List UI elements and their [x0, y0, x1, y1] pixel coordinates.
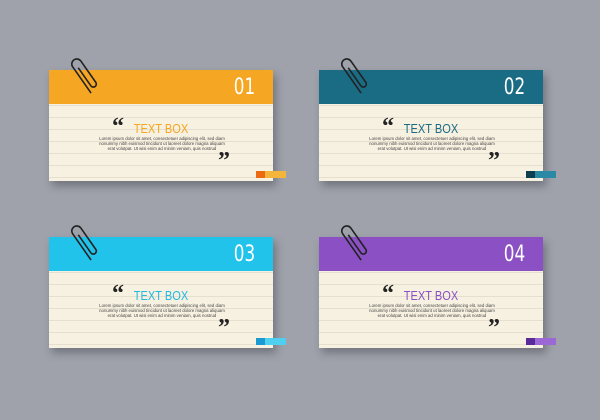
body text 02: Lorem ipsum dolor sit amet, consectetuer adipiscing elit, sed diam nonummy nibh euismod tincidunt ut laoreet dolore magna aliquam erat volutpat. Ut wisi enim ad minim veniam, quis nostrud — [369, 136, 495, 151]
icon: paperclip 4 — [341, 225, 368, 260]
card 03 — [49, 237, 273, 348]
open quote: “ — [112, 114, 124, 140]
header bar 04 — [319, 237, 543, 271]
title 01: TEXT BOX — [134, 121, 188, 136]
card 01 — [49, 70, 273, 181]
open quote: “ — [112, 281, 124, 307]
header bar 01 — [49, 70, 273, 104]
title 02: TEXT BOX — [404, 121, 458, 136]
tab 03 — [256, 338, 286, 345]
body text 03: Lorem ipsum dolor sit amet, consectetuer adipiscing elit, sed diam nonummy nibh euismod tincidunt ut laoreet dolore magna aliquam erat volutpat. Ut wisi enim ad minim veniam, quis nostrud — [99, 303, 225, 318]
tab 04 — [526, 338, 556, 345]
header bar 01: 01 — [234, 75, 255, 100]
open quote: “ — [382, 281, 394, 307]
header bar 04: 04 — [504, 242, 525, 267]
open quote: “ — [382, 114, 394, 140]
close quote: ” — [218, 315, 230, 341]
icon: paperclip 1 — [71, 58, 98, 94]
tab 01 — [256, 171, 286, 178]
card 02 — [319, 70, 543, 181]
icon: paperclip 2 — [341, 58, 368, 94]
title 03: TEXT BOX — [134, 288, 188, 303]
close quote: ” — [488, 148, 500, 174]
card 04 — [319, 237, 543, 348]
header bar 03 — [49, 237, 273, 271]
header bar 02 — [319, 70, 543, 104]
header bar 03: 03 — [234, 242, 255, 267]
icon: paperclip 3 — [71, 225, 98, 260]
body text 01: Lorem ipsum dolor sit amet, consectetuer adipiscing elit, sed diam nonummy nibh euismod tincidunt ut laoreet dolore magna aliquam erat volutpat. Ut wisi enim ad minim veniam, quis nostrud — [99, 136, 225, 151]
close quote: ” — [218, 148, 230, 174]
header bar 02: 02 — [504, 75, 525, 100]
title 04: TEXT BOX — [404, 288, 458, 303]
close quote: ” — [488, 315, 500, 341]
body text 04: Lorem ipsum dolor sit amet, consectetuer adipiscing elit, sed diam nonummy nibh euismod tincidunt ut laoreet dolore magna aliquam erat volutpat. Ut wisi enim ad minim veniam, quis nostrud — [369, 303, 495, 318]
tab 02 — [526, 171, 556, 178]
